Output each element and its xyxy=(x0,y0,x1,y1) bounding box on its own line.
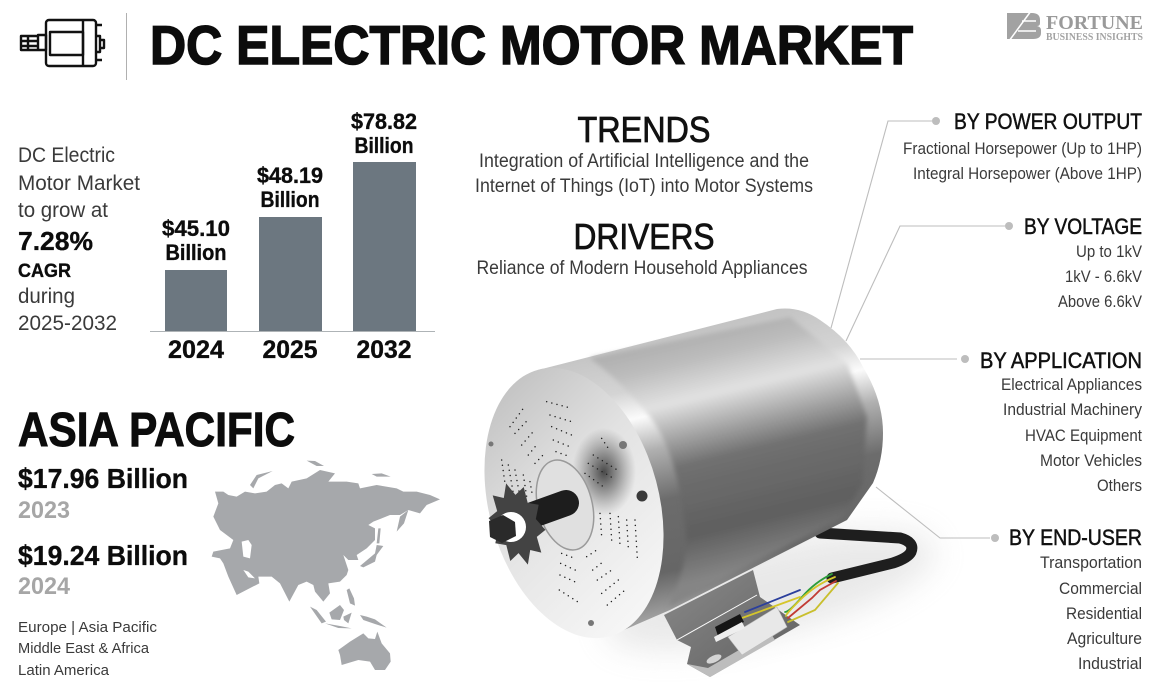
regional stats: ASIA PACIFIC xyxy=(18,404,295,457)
CAGR text block: DC Electric xyxy=(18,144,115,167)
regional stats: 2024 xyxy=(18,573,71,600)
segment: by voltage: 1kV - 6.6kV xyxy=(1065,268,1142,286)
bar 2032: Billion xyxy=(354,133,414,158)
title: DC ELECTRIC MOTOR MARKET xyxy=(150,14,913,76)
regions list: Latin America xyxy=(18,662,110,679)
segment: by application xyxy=(980,348,1143,495)
regional stats: $19.24 Billion xyxy=(18,540,188,571)
CAGR text block: 7.28% xyxy=(18,226,93,256)
header divider xyxy=(126,13,127,80)
connector xyxy=(714,607,787,655)
segment: by application: BY APPLICATION xyxy=(980,348,1142,373)
sprocket xyxy=(481,477,553,571)
regional stats xyxy=(18,404,295,600)
segment: by application: Motor Vehicles xyxy=(1040,452,1142,470)
segment: by application: Industrial Machinery xyxy=(1003,401,1143,419)
segment: by end-user: Agriculture xyxy=(1067,630,1142,648)
bar 2032: $78.82 xyxy=(351,109,417,134)
motor shadow xyxy=(594,505,946,675)
segment: by end-user: Commercial xyxy=(1059,580,1142,598)
washer xyxy=(496,512,526,542)
segment: by voltage xyxy=(1024,214,1142,311)
trends and drivers: TRENDS xyxy=(578,109,710,150)
bar 2024: 2024 xyxy=(168,336,224,364)
body centre section xyxy=(590,317,867,607)
bar 2024: $45.10 xyxy=(162,216,230,241)
motor body xyxy=(538,308,883,636)
CAGR text block: Motor Market xyxy=(18,172,140,195)
regions list xyxy=(18,619,157,679)
CAGR text block: during xyxy=(18,285,75,308)
bar 2024: Billion xyxy=(166,240,226,265)
bar 2025: Billion xyxy=(260,187,320,212)
segment: by end-user: Residential xyxy=(1066,605,1142,623)
trends and drivers xyxy=(475,109,813,279)
segment: by end-user: Transportation xyxy=(1040,554,1142,572)
wires xyxy=(742,574,838,622)
trends and drivers: Integration of Artificial Intelligence and the xyxy=(479,151,809,172)
trends and drivers: Internet of Things (IoT) into Motor Systems xyxy=(475,176,813,197)
cable xyxy=(820,533,912,578)
leader lines xyxy=(831,117,1013,542)
segment: by power output: Fractional Horsepower (Up to 1HP) xyxy=(903,140,1142,158)
bar 2032 xyxy=(351,109,417,364)
icon: DC motor xyxy=(21,20,104,66)
logo: Fortune Business Insights: FORTUNE xyxy=(1046,12,1143,34)
segment: by power output: Integral Horsepower (Above 1HP) xyxy=(913,165,1142,183)
map: Asia Pacific xyxy=(212,461,440,670)
segment: by application: HVAC Equipment xyxy=(1025,427,1142,445)
CAGR text block: to grow at xyxy=(18,199,108,222)
logo: Fortune Business Insights: BUSINESS INSIGHTS xyxy=(1046,32,1143,43)
CAGR text block: 2025-2032 xyxy=(18,312,117,335)
bar 2024 xyxy=(162,216,230,364)
bar 2025: 2025 xyxy=(262,336,318,364)
CAGR text block xyxy=(18,144,140,335)
mounting screws xyxy=(488,441,648,626)
centre recess xyxy=(527,454,603,556)
segment: by voltage: Up to 1kV xyxy=(1076,243,1142,261)
segment: by end-user: Industrial xyxy=(1078,655,1142,673)
motor shaft xyxy=(527,503,566,517)
segment: by application: Others xyxy=(1097,477,1142,495)
bar 2032: 2032 xyxy=(356,336,412,364)
regions list: Europe | Asia Pacific xyxy=(18,619,157,636)
mounting bracket xyxy=(664,570,800,677)
segment: by end-user: BY END-USER xyxy=(1009,525,1142,550)
motor illustration xyxy=(456,308,946,677)
regional stats: $17.96 Billion xyxy=(18,463,188,494)
motor front face xyxy=(456,348,692,658)
nut xyxy=(489,515,516,543)
regions list: Middle East & Africa xyxy=(18,640,150,657)
bar 2025: $48.19 xyxy=(257,163,323,188)
logo: Fortune Business Insights xyxy=(1007,11,1143,43)
CAGR text block: CAGR xyxy=(18,261,71,282)
face shading xyxy=(572,428,636,516)
trends and drivers: Reliance of Modern Household Appliances xyxy=(476,258,808,279)
segment: by voltage: BY VOLTAGE xyxy=(1024,214,1142,239)
regional stats: 2023 xyxy=(18,497,70,524)
segment: by voltage: Above 6.6kV xyxy=(1058,293,1142,311)
segment: by power output xyxy=(903,109,1142,183)
ventilation holes xyxy=(502,402,637,605)
segment: by end-user xyxy=(1009,525,1142,673)
trends and drivers: DRIVERS xyxy=(574,216,714,257)
bar 2025 xyxy=(257,163,323,364)
bar chart xyxy=(150,109,435,364)
segment: by application: Electrical Appliances xyxy=(1001,376,1142,394)
